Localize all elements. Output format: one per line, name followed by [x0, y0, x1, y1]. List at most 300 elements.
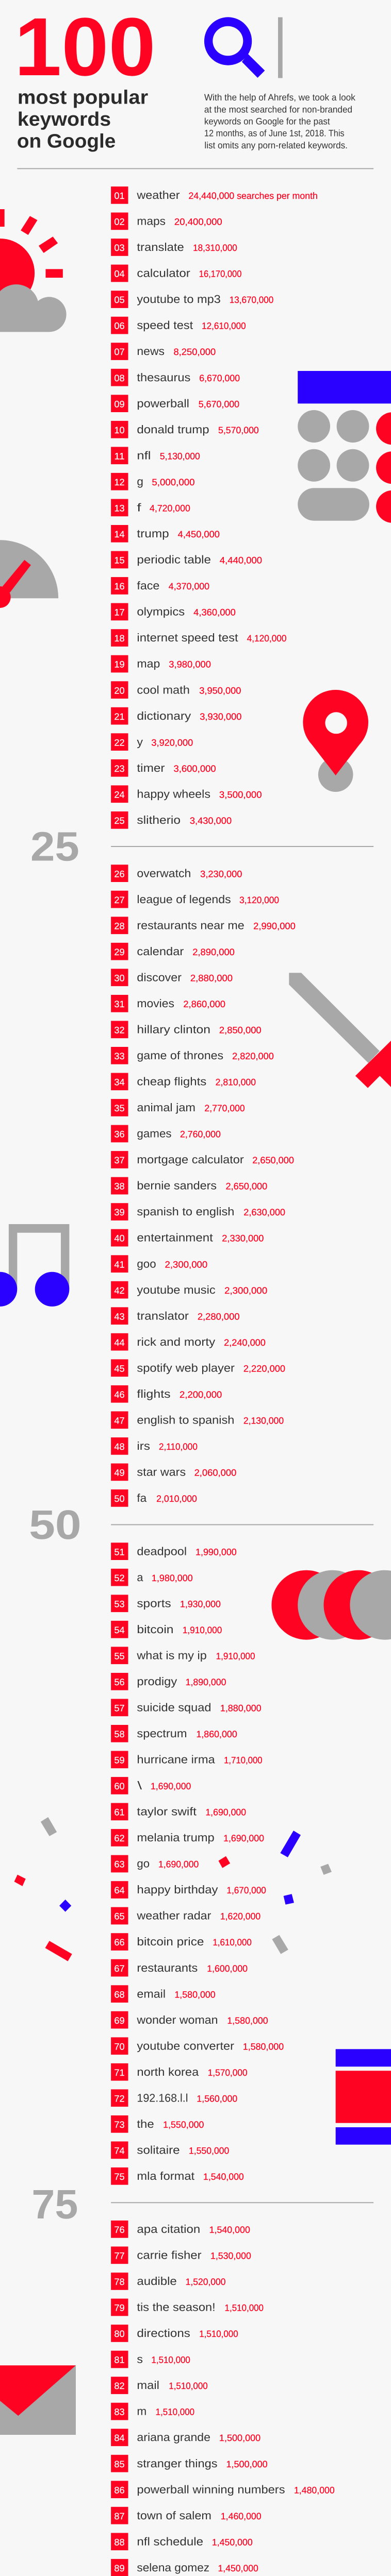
icon: sword	[289, 973, 391, 1088]
row 74 solitaire: 1,550,000	[189, 2145, 229, 2156]
row 71 north korea: north korea	[137, 2065, 199, 2078]
row 61 taylor swift: taylor swift	[137, 1805, 197, 1818]
row 67 restaurants: restaurants	[137, 1961, 198, 1974]
row 75 mla format: mla format	[137, 2170, 194, 2182]
row 11 nfl: nfl	[137, 449, 151, 462]
row 38 bernie sanders: 2,650,000	[225, 1181, 267, 1192]
row 83 m: 1,510,000	[156, 2407, 194, 2417]
row 08 thesaurus: 6,670,000	[199, 373, 240, 383]
row 57 suicide squad: 1,880,000	[220, 1703, 262, 1714]
row 36 games: games	[137, 1127, 172, 1140]
intro paragraph	[204, 92, 356, 150]
row 23 timer: 3,600,000	[173, 764, 216, 774]
row 34 cheap flights: cheap flights	[137, 1075, 206, 1088]
row 79 tis the season!: tis the season!	[137, 2301, 216, 2314]
row 86 powerball winning numbers	[111, 2481, 335, 2498]
row 59 hurricane irma: 1,710,000	[224, 1755, 263, 1765]
row 41 goo: 41	[114, 1259, 125, 1269]
row 47 english to spanish: 47	[114, 1415, 125, 1426]
intro paragraph: at the most searched for non-branded	[204, 104, 352, 114]
row 84 ariana grande	[111, 2429, 260, 2446]
row 69 wonder woman	[111, 2011, 268, 2029]
row 72 192.168.l.l: 192.168.l.l	[137, 2091, 188, 2104]
row 45 spotify web player: 2,220,000	[243, 1363, 285, 1374]
row 37 mortgage calculator: 37	[114, 1155, 125, 1165]
row 04 calculator	[111, 265, 241, 282]
row 72 192.168.l.l	[111, 2089, 237, 2107]
row 44 rick and morty	[111, 1333, 266, 1351]
row 68 email	[111, 1985, 216, 2003]
row 51 deadpool: 1,990,000	[196, 1547, 237, 1557]
row 09 powerball: 09	[114, 399, 125, 409]
row 22 y: 22	[114, 737, 125, 748]
row 26 overwatch: overwatch	[137, 867, 191, 879]
row 43 translator: 43	[114, 1311, 125, 1321]
row 04 calculator: 04	[114, 269, 125, 279]
row 18 internet speed test: 4,120,000	[247, 633, 286, 643]
row 76 apa citation: 1,540,000	[209, 2225, 250, 2235]
row 15 periodic table: periodic table	[137, 553, 211, 566]
row 10 donald trump: 10	[114, 425, 125, 435]
row 34 cheap flights: 2,810,000	[216, 1077, 256, 1087]
row 67 restaurants	[111, 1959, 248, 1976]
row 03 translate	[111, 239, 237, 256]
row 03 translate: translate	[137, 241, 184, 253]
row 03 translate: 18,310,000	[193, 243, 237, 253]
row 50 fa: 2,010,000	[156, 1494, 197, 1504]
row 02 maps: 20,400,000	[174, 216, 222, 227]
row 66 bitcoin price: 66	[114, 1937, 125, 1947]
row 49 star wars: 49	[114, 1467, 125, 1478]
row 61 taylor swift: 1,690,000	[205, 1807, 246, 1818]
row 73 the: the	[137, 2117, 154, 2130]
row 24 happy wheels	[111, 785, 262, 803]
row 46 flights: 46	[114, 1389, 125, 1400]
row 18 internet speed test: internet speed test	[137, 631, 238, 644]
icon: map pin	[303, 690, 368, 792]
row 88 nfl schedule: 88	[114, 2537, 125, 2547]
row 63 go: 1,690,000	[158, 1859, 199, 1870]
row 62 melania trump: 62	[114, 1833, 125, 1843]
row 73 the: 73	[114, 2120, 125, 2130]
row 17 olympics: olympics	[137, 605, 185, 618]
row 61 taylor swift: 61	[114, 1807, 125, 1818]
row 27 league of legends	[111, 891, 279, 908]
row 64 happy birthday: 1,670,000	[226, 1885, 266, 1895]
row 22 y: 3,920,000	[151, 737, 193, 748]
row 11 nfl: 5,130,000	[160, 451, 200, 461]
row 16 face: 16	[114, 581, 125, 591]
row 43 translator: 2,280,000	[198, 1311, 240, 1321]
heading: most popular keywords on Google: most popular	[18, 87, 148, 109]
row 70 youtube converter: 1,580,000	[243, 2041, 284, 2052]
keyword rows 26-50	[111, 865, 296, 1507]
row 62 melania trump: 1,690,000	[223, 1833, 264, 1843]
row 54 bitcoin	[111, 1621, 222, 1638]
row 27 league of legends: 27	[114, 895, 125, 905]
row 29 calendar: 29	[114, 947, 125, 957]
row 02 maps: maps	[137, 214, 166, 228]
row 21 dictionary: 21	[114, 711, 125, 722]
row 69 wonder woman: 69	[114, 2015, 125, 2026]
row 84 ariana grande: 1,500,000	[219, 2433, 260, 2443]
row 18 internet speed test: 18	[114, 633, 125, 643]
row 40 entertainment: entertainment	[137, 1231, 213, 1244]
row 74 solitaire	[111, 2141, 229, 2159]
row 86 powerball winning numbers: 86	[114, 2485, 125, 2495]
row 71 north korea	[111, 2063, 248, 2081]
row 82 mail: mail	[137, 2379, 159, 2392]
row 46 flights: flights	[137, 1387, 171, 1400]
row 03 translate: 03	[114, 243, 125, 253]
icon: speed gauge	[0, 540, 58, 608]
row 70 youtube converter: 70	[114, 2041, 125, 2052]
row 06 speed test	[111, 317, 246, 334]
row 59 hurricane irma	[111, 1751, 263, 1768]
row 22 y: y	[137, 735, 143, 748]
row 20 cool math	[111, 681, 241, 699]
icon: confetti	[14, 1817, 332, 1961]
heading: most popular keywords on Google: on Google	[17, 131, 116, 152]
row 06 speed test: 06	[114, 321, 125, 331]
row 52 a: 1,980,000	[152, 1573, 193, 1583]
row 37 mortgage calculator: mortgage calculator	[137, 1153, 244, 1166]
row 09 powerball: powerball	[137, 397, 189, 410]
row 65 weather radar: weather radar	[136, 1909, 211, 1922]
row 63 go	[111, 1855, 199, 1872]
row 51 deadpool	[111, 1543, 237, 1560]
intro paragraph: With the help of Ahrefs, we took a look	[204, 92, 356, 103]
row 28 restaurants near me: 2,990,000	[253, 921, 296, 931]
row 39 spanish to english: spanish to english	[137, 1205, 234, 1218]
row 49 star wars	[111, 1463, 236, 1481]
row 33 game of thrones: 33	[114, 1051, 125, 1061]
intro paragraph: keywords on Google for the past	[204, 116, 330, 127]
row 55 what is my ip: 55	[114, 1651, 125, 1661]
row 15 periodic table	[111, 551, 262, 568]
icon: calculator	[298, 371, 391, 523]
row 55 what is my ip: 1,910,000	[216, 1651, 255, 1661]
row 27 league of legends: 3,120,000	[239, 895, 279, 905]
row 65 weather radar	[111, 1907, 260, 1924]
row 15 periodic table: 4,440,000	[220, 555, 262, 566]
row 73 the: 1,550,000	[163, 2120, 204, 2130]
row 60 backslash	[111, 1777, 191, 1794]
row 79 tis the season!: 79	[114, 2303, 125, 2313]
row 10 donald trump: donald trump	[137, 423, 209, 436]
row 81 s: s	[137, 2353, 143, 2366]
row 54 bitcoin: bitcoin	[137, 1623, 173, 1636]
row 64 happy birthday: happy birthday	[137, 1883, 218, 1896]
intro paragraph: 12 months, as of June 1st, 2018. This	[204, 128, 345, 139]
icon: music note	[0, 1224, 69, 1307]
row 58 spectrum: 1,860,000	[196, 1729, 237, 1739]
row 13 f	[111, 499, 190, 516]
icon: envelope	[0, 2365, 76, 2435]
row 32 hillary clinton	[111, 1021, 262, 1038]
row 79 tis the season!	[111, 2299, 264, 2316]
row 01 weather: 24,440,000 searches per month	[188, 191, 318, 201]
row 19 map	[111, 655, 211, 672]
row 79 tis the season!: 1,510,000	[225, 2303, 264, 2313]
row 21 dictionary: dictionary	[137, 709, 191, 722]
row 19 map: 3,980,000	[169, 659, 211, 670]
row 07 news: 07	[114, 347, 125, 357]
row 25 slitherio: slitherio	[137, 814, 181, 826]
row 46 flights	[111, 1385, 222, 1403]
section number: 25: 25	[30, 823, 79, 870]
row 45 spotify web player: spotify web player	[137, 1361, 235, 1374]
row 75 mla format	[111, 2167, 244, 2185]
row 45 spotify web player: 45	[114, 1363, 125, 1374]
row 89 selena gomez	[111, 2559, 258, 2576]
row 08 thesaurus: 08	[114, 373, 125, 383]
row 24 happy wheels: happy wheels	[137, 787, 210, 800]
row 20 cool math: cool math	[137, 683, 190, 696]
row 83 m: 83	[114, 2407, 125, 2417]
row 31 movies: movies	[137, 997, 174, 1010]
row 40 entertainment: 2,330,000	[222, 1233, 264, 1244]
row 21 dictionary: 3,930,000	[200, 711, 241, 722]
row 80 directions: directions	[137, 2327, 190, 2340]
row 48 irs: 48	[114, 1442, 125, 1452]
row 17 olympics: 4,360,000	[193, 607, 236, 618]
row 33 game of thrones: 2,820,000	[232, 1051, 274, 1061]
row 27 league of legends: league of legends	[137, 893, 231, 906]
row 52 a: 52	[114, 1573, 125, 1583]
row 06 speed test: 12,610,000	[202, 321, 246, 331]
row 44 rick and morty: rick and morty	[137, 1335, 215, 1348]
row 76 apa citation: 76	[114, 2225, 125, 2235]
row 80 directions: 80	[114, 2329, 125, 2339]
row 86 powerball winning numbers: 1,480,000	[294, 2485, 335, 2495]
row 41 goo	[111, 1255, 207, 1273]
row 22 y	[111, 733, 193, 751]
row 09 powerball: 5,670,000	[199, 399, 239, 409]
row 50 fa	[111, 1489, 197, 1507]
row 77 carrie fisher: 77	[114, 2250, 125, 2261]
row 41 goo: goo	[137, 1257, 156, 1270]
row 82 mail: 1,510,000	[169, 2381, 208, 2391]
row 48 irs: irs	[137, 1439, 150, 1452]
row 52 a: a	[137, 1571, 143, 1584]
row 69 wonder woman: wonder woman	[136, 2013, 218, 2026]
row 25 slitherio	[111, 811, 232, 829]
row 53 sports	[111, 1595, 221, 1612]
row 38 bernie sanders: 38	[114, 1181, 125, 1192]
row 31 movies: 2,860,000	[183, 999, 225, 1009]
row 66 bitcoin price: bitcoin price	[137, 1935, 204, 1948]
row 58 spectrum: spectrum	[137, 1727, 187, 1740]
row 34 cheap flights	[111, 1073, 256, 1090]
row 05 youtube to mp3: 13,670,000	[230, 295, 273, 305]
row 81 s: 81	[114, 2355, 125, 2365]
row 11 nfl: 11	[114, 451, 125, 461]
row 65 weather radar: 1,620,000	[220, 1911, 260, 1922]
row 14 trump: trump	[137, 527, 169, 540]
row 46 flights: 2,200,000	[180, 1389, 222, 1400]
icon: magnifying glass	[204, 17, 265, 78]
row 02 maps: 02	[114, 216, 125, 227]
row 78 audible: audible	[137, 2275, 177, 2287]
row 42 youtube music: youtube music	[137, 1283, 216, 1296]
row 18 internet speed test	[111, 629, 286, 647]
row 47 english to spanish	[111, 1411, 284, 1429]
row 70 youtube converter	[111, 2037, 284, 2055]
row 32 hillary clinton: 32	[114, 1025, 125, 1036]
row 36 games	[111, 1125, 221, 1142]
row 20 cool math: 20	[114, 685, 125, 696]
row 78 audible: 1,520,000	[186, 2277, 225, 2287]
row 88 nfl schedule: 1,450,000	[212, 2537, 253, 2547]
row 29 calendar: calendar	[137, 945, 184, 958]
row 13 f: 4,720,000	[150, 503, 190, 513]
row 60 backslash: 1,690,000	[151, 1781, 191, 1791]
row 37 mortgage calculator	[111, 1151, 294, 1168]
row 80 directions: 1,510,000	[199, 2329, 238, 2339]
row 83 m: m	[137, 2405, 146, 2418]
row 71 north korea: 71	[114, 2067, 125, 2078]
row 84 ariana grande: 84	[114, 2433, 125, 2443]
row 35 animal jam: 2,770,000	[204, 1103, 245, 1113]
row 35 animal jam	[111, 1099, 245, 1116]
row 43 translator	[111, 1307, 240, 1325]
row 72 192.168.l.l: 1,560,000	[197, 2093, 237, 2104]
row 53 sports: sports	[137, 1597, 171, 1609]
row 17 olympics	[111, 603, 236, 620]
row 44 rick and morty: 2,240,000	[224, 1337, 266, 1348]
row 44 rick and morty: 44	[114, 1337, 125, 1348]
row 69 wonder woman: 1,580,000	[227, 2015, 268, 2026]
row 34 cheap flights: 34	[114, 1077, 125, 1087]
row 40 entertainment: 40	[114, 1233, 125, 1244]
row 53 sports: 53	[114, 1599, 125, 1609]
row 35 animal jam: 35	[114, 1103, 125, 1113]
row 07 news	[111, 343, 216, 360]
section number: 50: 50	[29, 1502, 82, 1548]
row 54 bitcoin: 54	[114, 1625, 125, 1635]
row 24 happy wheels: 3,500,000	[219, 789, 262, 800]
heading: most popular keywords on Google	[17, 87, 148, 152]
row 14 trump: 4,450,000	[178, 529, 220, 539]
row 19 map: map	[137, 657, 160, 670]
row 33 game of thrones	[111, 1047, 274, 1064]
row 51 deadpool: deadpool	[137, 1545, 187, 1557]
row 84 ariana grande: ariana grande	[137, 2431, 210, 2444]
row 42 youtube music: 42	[114, 1285, 125, 1296]
row 77 carrie fisher: carrie fisher	[137, 2248, 202, 2262]
row 68 email: email	[137, 1987, 166, 2000]
row 30 discover: 2,880,000	[190, 973, 233, 983]
row 43 translator: translator	[137, 1309, 189, 1322]
row 75 mla format: 1,540,000	[203, 2172, 244, 2182]
row 04 calculator: calculator	[137, 267, 190, 280]
row 54 bitcoin: 1,910,000	[183, 1625, 222, 1635]
keyword rows 51-75	[111, 1543, 284, 2185]
row 38 bernie sanders	[111, 1177, 267, 1194]
row 73 the	[111, 2115, 204, 2133]
row 87 town of salem: 1,460,000	[221, 2511, 262, 2521]
row 49 star wars: 2,060,000	[194, 1467, 236, 1478]
icon: north korea flag	[336, 2049, 391, 2145]
row 35 animal jam: animal jam	[137, 1101, 196, 1114]
row 14 trump	[111, 525, 220, 543]
row 28 restaurants near me	[111, 917, 296, 934]
row 42 youtube music: 2,300,000	[224, 1285, 267, 1296]
row 56 prodigy: 56	[114, 1677, 125, 1687]
row 89 selena gomez: 1,450,000	[218, 2563, 258, 2573]
row 71 north korea: 1,570,000	[208, 2067, 248, 2078]
row 25 slitherio: 25	[114, 816, 125, 826]
row 49 star wars: star wars	[137, 1465, 186, 1479]
row 19 map: 19	[114, 659, 125, 670]
row 76 apa citation: apa citation	[137, 2223, 200, 2235]
row 89 selena gomez: 89	[114, 2563, 125, 2573]
row 02 maps	[111, 212, 222, 230]
row 57 suicide squad	[111, 1699, 262, 1716]
row 52 a	[111, 1569, 193, 1586]
row 38 bernie sanders: bernie sanders	[137, 1179, 217, 1192]
row 56 prodigy: 1,890,000	[186, 1677, 226, 1687]
row 06 speed test: speed test	[137, 319, 193, 332]
row 24 happy wheels: 24	[114, 789, 125, 800]
row 23 timer	[111, 759, 216, 777]
row 57 suicide squad: 57	[114, 1703, 125, 1714]
row 39 spanish to english	[111, 1203, 285, 1221]
row 50 fa: 50	[114, 1494, 125, 1504]
keyword rows 1-25	[111, 187, 318, 829]
row 80 directions	[111, 2325, 238, 2342]
row 87 town of salem	[111, 2507, 262, 2524]
row 61 taylor swift	[111, 1803, 246, 1820]
row 87 town of salem: 87	[114, 2511, 125, 2521]
icon: sun and cloud	[0, 209, 67, 332]
row 83 m	[111, 2403, 194, 2420]
row 64 happy birthday: 64	[114, 1885, 125, 1895]
row 85 stranger things: 1,500,000	[226, 2459, 268, 2469]
row 08 thesaurus	[111, 369, 240, 386]
row 70 youtube converter: youtube converter	[137, 2039, 234, 2052]
row 12 g: 12	[114, 477, 125, 487]
row 01 weather	[111, 187, 318, 204]
row 30 discover: 30	[114, 973, 125, 983]
row 14 trump: 14	[114, 529, 125, 539]
row 28 restaurants near me: 28	[114, 921, 125, 931]
row 09 powerball	[111, 395, 239, 412]
row 78 audible: 78	[114, 2277, 125, 2287]
row 23 timer: timer	[137, 761, 165, 774]
row 86 powerball winning numbers: powerball winning numbers	[137, 2483, 285, 2496]
row 08 thesaurus: thesaurus	[137, 371, 190, 384]
row 77 carrie fisher	[111, 2246, 251, 2264]
row 16 face: face	[137, 579, 159, 592]
row 74 solitaire: solitaire	[137, 2143, 180, 2157]
row 48 irs	[111, 1437, 198, 1455]
section number: 75: 75	[31, 2181, 78, 2227]
row 25 slitherio: 3,430,000	[190, 816, 232, 826]
row 21 dictionary	[111, 707, 241, 724]
row 60 backslash: \	[137, 1779, 142, 1792]
row 20 cool math: 3,950,000	[199, 685, 241, 696]
row 56 prodigy: prodigy	[137, 1675, 177, 1688]
row 07 news: news	[137, 345, 165, 358]
row 72 192.168.l.l: 72	[114, 2093, 125, 2104]
icon: text cursor	[278, 18, 283, 78]
row 07 news: 8,250,000	[173, 347, 216, 357]
row 26 overwatch	[111, 865, 242, 882]
icon: overlapping circles	[271, 1570, 391, 1640]
row 39 spanish to english: 39	[114, 1207, 125, 1217]
